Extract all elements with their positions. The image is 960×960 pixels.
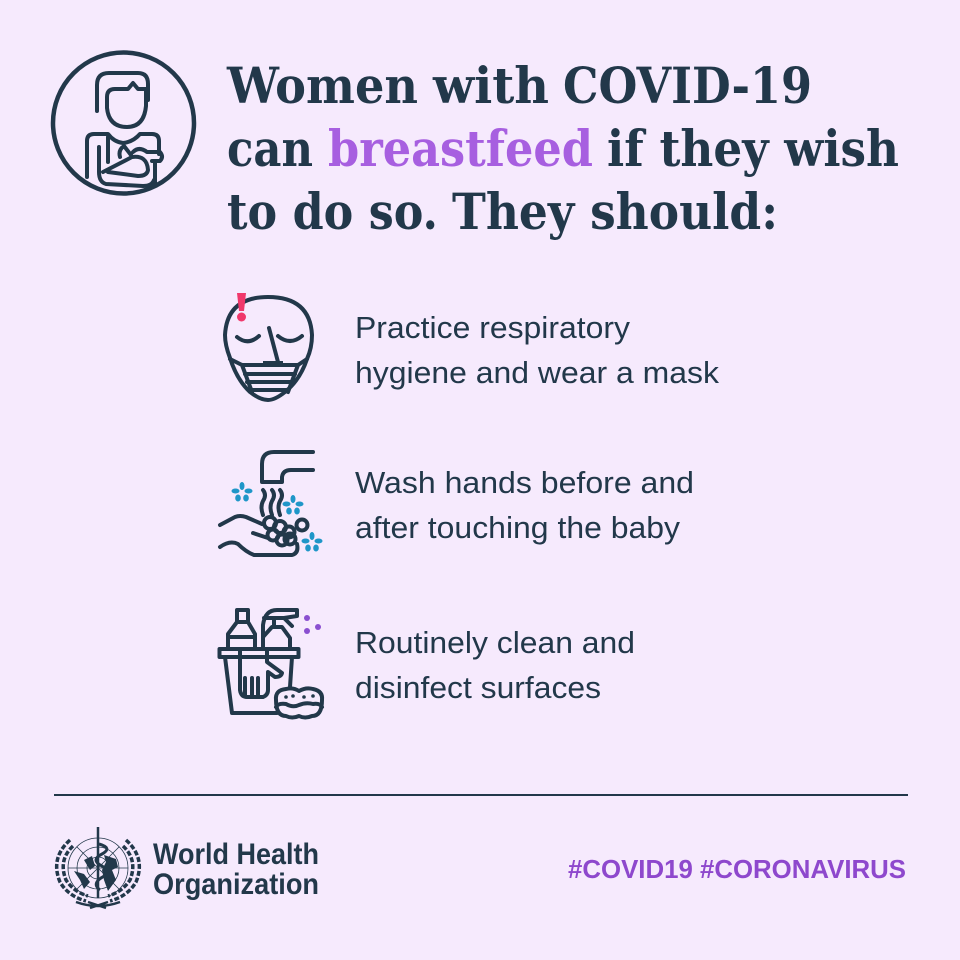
text: wash hands: Wash hands before and — [355, 465, 694, 500]
text: clean surfaces: Routinely clean and — [355, 625, 635, 660]
icon: hand washing under tap — [220, 452, 322, 555]
WHO wordmark: World Health — [153, 838, 319, 871]
hashtags: #COVID19 #CORONAVIRUS — [568, 854, 906, 884]
title: can — [227, 119, 313, 178]
text: respiratory hygiene: Practice respiratory — [355, 310, 631, 345]
icon: masked face with alert — [225, 293, 312, 400]
icon: cleaning bucket with spray and sponge — [220, 610, 322, 718]
text: wash hands — [355, 465, 694, 545]
title: breastfeed — [328, 119, 593, 178]
title: if they wish — [607, 119, 899, 178]
text: wash hands: after touching the baby — [355, 510, 681, 545]
text: clean surfaces: disinfect surfaces — [355, 670, 601, 705]
icon: breastfeeding woman in circle — [53, 52, 194, 194]
title: COVID-19 — [563, 56, 812, 115]
text: clean surfaces — [355, 625, 635, 705]
title: with — [432, 56, 549, 115]
WHO wordmark: Organization — [153, 868, 319, 901]
text: respiratory hygiene: hygiene and wear a mask — [355, 355, 720, 390]
text: respiratory hygiene — [355, 310, 720, 390]
WHO logo emblem — [57, 827, 139, 908]
title: They should: — [452, 182, 778, 241]
title: Women — [226, 56, 418, 115]
WHO wordmark — [153, 838, 319, 901]
title: to do so. — [227, 182, 438, 241]
title — [226, 56, 899, 241]
